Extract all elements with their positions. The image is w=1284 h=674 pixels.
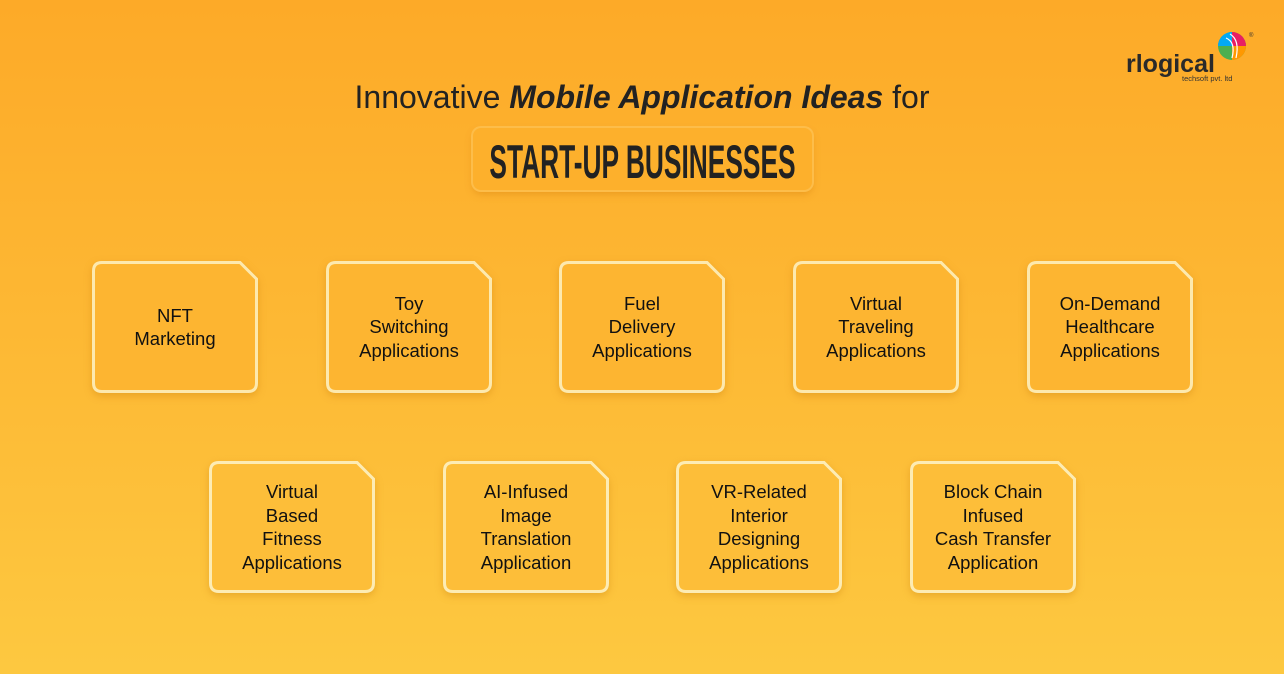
card: VR-Related Interior Designing [674,461,844,598]
card: Block Chain Cash Transfer: Application [948,552,1038,572]
card: Virtual Based Fitness: Applications [242,552,342,572]
card: AI-Infused Image Translation [441,461,611,598]
card: Virtual Based Fitness: Fitness [262,528,322,549]
title: Innovative Mobile Application Ideas for [355,79,929,115]
card: VR-Related Interior Designing: VR-Related [711,481,807,502]
card: Virtual Traveling: Virtual [850,293,902,314]
card: Block Chain Cash Transfer: Cash Transfer [935,528,1051,549]
card: Block Chain Cash Transfer: Block Chain [944,481,1042,502]
card: Virtual Traveling [792,261,960,398]
card: NFT Marketing: NFT [157,304,193,326]
card: Fuel Delivery: Applications [592,340,692,361]
logo [1126,32,1254,83]
card: NFT Marketing [90,261,260,398]
logo: techsoft pvt. ltd [1182,74,1232,83]
card: Virtual Traveling: Traveling [838,316,914,337]
card: Block Chain Cash Transfer: Infused [963,504,1023,526]
card: NFT Marketing: Marketing [134,328,216,349]
card: On-Demand Healthcare: Healthcare [1065,316,1155,337]
card: Virtual Based Fitness: Based [266,504,318,526]
card: Toy Switching: Applications [359,340,459,361]
card: AI-Infused Image Translation: Image [500,504,552,526]
card: Virtual Based Fitness [207,461,377,598]
card: On-Demand Healthcare [1026,261,1194,398]
card: Toy Switching: Switching [369,316,449,337]
card: AI-Infused Image Translation: AI-Infused [484,481,568,502]
card: On-Demand Healthcare: Applications [1060,340,1160,361]
card: Virtual Traveling: Applications [826,340,926,361]
card: Toy Switching: Toy [395,293,423,314]
card: Block Chain Cash Transfer [908,461,1078,598]
badge: start-up businesses: START-UP BUSINESSES [489,135,796,188]
card: Virtual Based Fitness: Virtual [266,481,318,502]
card: Fuel Delivery [558,261,726,398]
card: Toy Switching [324,261,494,398]
card: AI-Infused Image Translation: Application [481,552,571,572]
card: VR-Related Interior Designing: Interior [730,504,788,526]
card: On-Demand Healthcare: On-Demand [1060,293,1160,314]
card: Fuel Delivery: Fuel [624,293,660,314]
icon: logo mark [1218,32,1246,60]
logo: ® [1249,32,1254,39]
card: Fuel Delivery: Delivery [609,316,675,337]
card: VR-Related Interior Designing: Applications [709,552,809,572]
card: VR-Related Interior Designing: Designing [718,528,800,549]
card: AI-Infused Image Translation: Translation [481,528,571,549]
logo: rlogical [1126,50,1215,78]
